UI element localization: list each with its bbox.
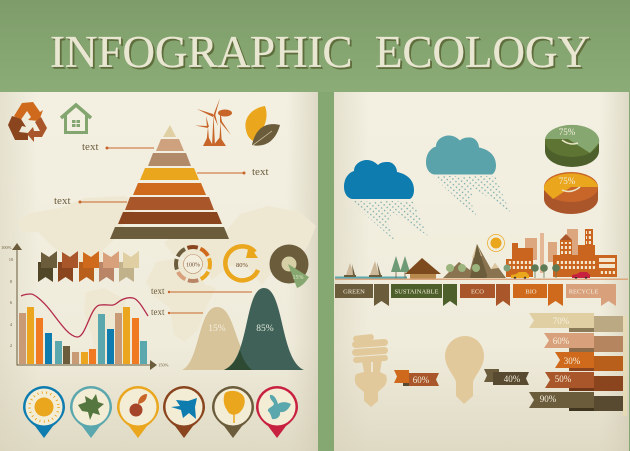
house: [405, 258, 441, 278]
panel: left background: [0, 92, 318, 451]
bookmark row: [38, 251, 139, 282]
ring 100%: 100%: [186, 262, 200, 268]
icon: house: [61, 105, 91, 132]
bar chart: [1, 243, 169, 370]
ribbon: 70%: 70%: [553, 316, 570, 326]
ribbon: sustainable: [391, 284, 457, 306]
pin: apple: [117, 386, 159, 438]
pyramid label 3: text: [54, 195, 70, 207]
pyramid label 1: text: [82, 141, 98, 153]
ring 15%: 15%: [292, 275, 304, 281]
sun: [488, 234, 504, 252]
teal cloud: [426, 136, 496, 174]
bell label 1: text: [151, 286, 165, 296]
chart axes: 4: [10, 322, 13, 327]
chart axes: 150%: [158, 362, 169, 368]
bell label 2: [151, 307, 203, 317]
stacked ribbons: [529, 313, 627, 416]
title: INFOGRAPHIC ECOLOGY: [50, 27, 590, 77]
ring 100%: [176, 247, 210, 281]
ribbon: 60%: [394, 370, 439, 386]
rain under teal cloud: [432, 176, 510, 217]
ribbon: recycle: [566, 284, 616, 306]
mountains: [443, 244, 506, 278]
water strip: [335, 276, 407, 278]
ribbon: 90%: 90%: [540, 394, 557, 404]
icon: wind turbines: [195, 98, 232, 146]
ribbon: 40%: [484, 369, 529, 385]
chart axes: [1, 243, 169, 370]
icon: recycle: [8, 102, 47, 142]
rain under blue cloud: [350, 201, 428, 241]
round trees: [446, 264, 480, 272]
bell label 1: [151, 286, 252, 296]
red car: [572, 272, 590, 279]
ribbon: green: GREEN: [343, 288, 365, 296]
ribbon: bio: [513, 284, 563, 306]
panel: right background: [334, 92, 629, 451]
ribbon: 60%: 60%: [413, 375, 430, 385]
pin: tree: [212, 386, 254, 438]
ribbon: 50%: 50%: [555, 374, 572, 384]
pyramid label 3: [54, 195, 127, 207]
chart axes: 2: [10, 343, 12, 348]
landscape: [335, 229, 628, 280]
bell curves: 85%: [256, 324, 274, 334]
ribbon: bio: BIO: [525, 288, 537, 296]
pie: orange 75%: 75%: [559, 176, 576, 186]
city: [506, 229, 617, 277]
chart axes: 100%: [1, 245, 12, 250]
pie: green 75%: [545, 125, 599, 167]
ribbon: 60% stacked: 60%: [553, 336, 570, 346]
icon: spiral bulb: [352, 334, 388, 407]
pie: orange 75%: [544, 172, 598, 214]
header band: [0, 0, 630, 92]
ring 15%: [270, 244, 309, 288]
pin: sun: [23, 386, 65, 438]
yellow car: [511, 272, 529, 279]
pyramid label 2: [197, 166, 268, 178]
chart axes: 8: [10, 279, 13, 284]
pyramid: [110, 125, 229, 239]
ribbon: recycle: RECYCLE: [569, 288, 598, 296]
icon: light bulb: [445, 336, 484, 404]
pin: bird: [163, 386, 205, 438]
line curve: [21, 294, 148, 337]
pie: green 75%: 75%: [559, 127, 576, 137]
city trees: [504, 264, 560, 278]
bell label 2: text: [151, 307, 165, 317]
world map: [17, 196, 316, 368]
ring 80%: 80%: [236, 262, 249, 269]
ribbon: eco: [460, 284, 510, 306]
pin: butterfly: [256, 386, 298, 438]
pyramid label 1: [82, 141, 154, 153]
bell curves: [182, 288, 304, 370]
pine trees: [391, 256, 410, 278]
chart axes: 10: [9, 257, 14, 262]
ribbon: eco: ECO: [471, 288, 484, 296]
ribbon: sustainable: SUSTAINABLE: [395, 288, 438, 296]
boats: [344, 261, 382, 277]
ring 80%: [225, 245, 258, 280]
chart axes: 6: [10, 300, 13, 305]
blue cloud: [344, 160, 414, 199]
ground line: [335, 278, 628, 280]
ribbon: 40%: 40%: [504, 374, 521, 384]
pin: leaf: [70, 386, 112, 438]
ribbon: 30%: 30%: [564, 356, 581, 366]
icon: leaves: [245, 106, 280, 146]
bell curves: 15%: [208, 324, 226, 334]
ribbon: green: [335, 284, 389, 306]
pyramid label 2: text: [252, 166, 268, 178]
